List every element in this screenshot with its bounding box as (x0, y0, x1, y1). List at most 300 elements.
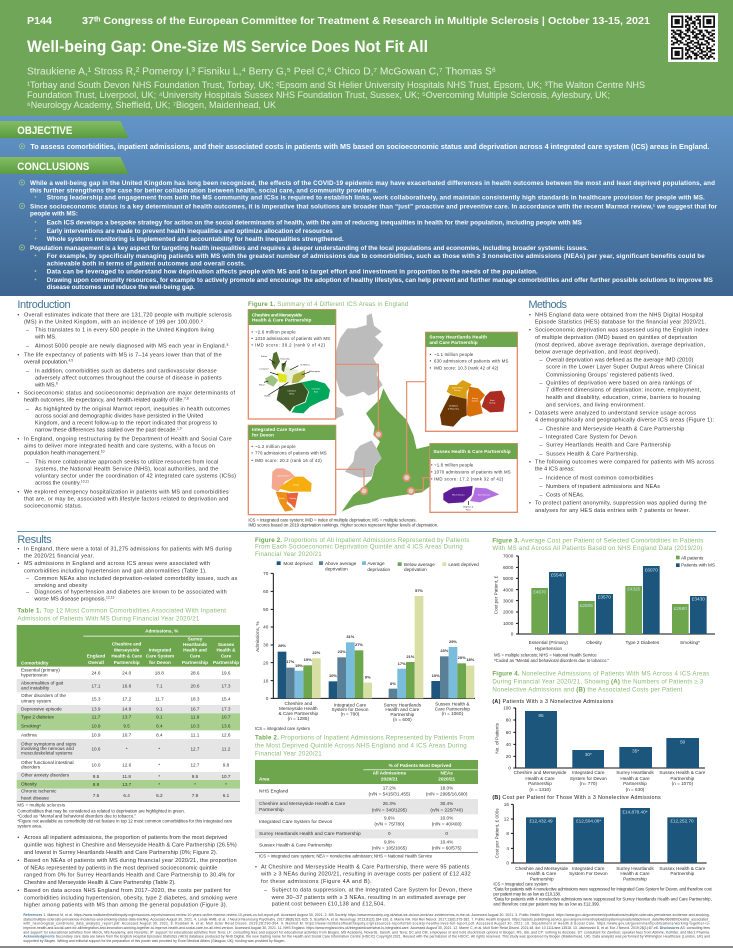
conclusions text: people with MS: (30, 211, 78, 218)
panel: table 2 and findings (255, 735, 478, 908)
figure 4 footnotes: ICS = integrated care system (493, 882, 548, 887)
figure 2 value labels: 17% (286, 659, 295, 664)
table 1 rows: 8.4 (156, 733, 163, 738)
conclusions text: For example, by specifically managing patients with MS with the greatest number of admissions due to comorbidities, such as those with ≥ 3 nonelective admissions (NEAs) per year, significant benefits could be (47, 253, 705, 260)
figure 2 bars (278, 596, 474, 698)
callout: Devon: 770 admissions of patients with MS (255, 451, 327, 456)
introduction text: population health management. (24, 451, 101, 457)
figure 3 axes: 7000 (503, 554, 514, 559)
figure 2 axes: 70 (263, 571, 269, 576)
methods text: Overall deprivation was defined as the average IMD (2010) (546, 358, 694, 364)
introduction text: In addition, comorbidities such as diabetes and cardiovascular disease (35, 368, 217, 374)
table 1 header: Care (190, 654, 201, 659)
affiliations (27, 80, 645, 110)
methods text: Quintiles of deprivation were based on area rankings of (546, 380, 692, 386)
figure 2 legend: deprivation (325, 567, 348, 572)
references and disclosures: References 1. Marmot M, et al. https://www.instituteofhealthequity.org/resources-reports/marmot-review-10-years-on/the-marmot-review-10-years-on-full-report.pdf. Accessed August 30, 2021. 2. MS Society. https://www.mssociety.org.uk/what-we-do/our-work/our-evidence/ms-in-the-uk. Accessed August 30, 2021. 3. Public Health England. https://www.gov.uk/government/publications/multiple-sclerosis-prevalence-incidence-and-smoking- (23, 913, 710, 917)
table 1 rows: 9.1 (156, 715, 163, 720)
table 1 header: Health & Care (111, 654, 142, 659)
map: Surrey Heartlands: & Waverley (448, 407, 460, 410)
table 2 rows: 18.0% (440, 785, 453, 790)
table 1 rows: 10.7 (221, 715, 231, 720)
table 1 footnotes (17, 803, 233, 829)
conclusions text: Early interventions are made to prevent health inequalities and optimize allocation of resources (47, 228, 333, 235)
introduction text: aims to deliver more integrated health and care systems, with a focus on (24, 444, 215, 450)
chart B: cost per patient: £14,878.40* (622, 810, 648, 815)
map: Cheshire and Merseyside: Wirral (259, 384, 265, 387)
table 1 footnotes: *Figure not available as comorbidity did not feature in top 12 most common comorbidities for this integrated care (17, 819, 233, 824)
figure 2 footnote: ICS = integrated care system (255, 726, 310, 731)
references and disclosures: supported by Biogen. Writing and editorial support for the preparation of this poster was provided by Excel Medical Affairs (Glasgow, UK); funding was provided by Biogen. (23, 939, 285, 943)
location markers (361, 431, 414, 494)
introduction text: This translates to 1 in every 500 people in the United Kingdom living (35, 328, 214, 334)
methods text: Costs of NEAs. (546, 492, 585, 498)
findings text: – (264, 888, 268, 894)
introduction text (17, 313, 236, 510)
references and disclosures: status/multiple-sclerosis-prevalence-incidence-and-smoking-status-data-briefing. Accessed August 30, 2021. 4. Lunde HMB, et al. J Neurol Neurosurg Psychiatry. 2017;88(8):621-625. 5. Scalfari A, et al. Neurology. 2013;81(2):184-192. 6. Marrie RA. Nat Rev Neurol. 2017;13(6):375-382. 7. Public Health England. https://assets.publishing.service.gov.uk/government/uploads/system/uploads/attachment_data/file/660860/Deaths_associated_ (23, 917, 710, 921)
results findings: ranged from 0% for Surrey Heartlands Health and Care Partnership to 30.4% for (24, 873, 235, 879)
chart A: patients with 3 or more nonelective admissions: (n = 630) (626, 787, 645, 792)
table 1 header: Care (221, 654, 232, 659)
chart A: patients with 3 or more nonelective admissions: (n = 1070) (672, 781, 693, 786)
table 1 footnotes: Comorbidities that may be considered as related to deprivation are highlighted in green. (17, 809, 185, 814)
results bullets: comorbidities including hypertension and gait abnormalities (Table 1). (24, 568, 207, 574)
table 1 rows: 12.6 (221, 733, 231, 738)
map: Sussex: Brighton & (463, 506, 474, 509)
figure 4 footnotes (493, 882, 712, 907)
methods text: Surrey Heartlands Health and Care Partnership (546, 443, 671, 449)
table 1 header: for Devon (149, 660, 171, 665)
panel: figure 1 map of ICS areas (248, 301, 517, 527)
methods text: – (539, 484, 543, 490)
table 1 rows: 9.5 (192, 774, 199, 779)
table 1 rows: 11.7 (92, 715, 101, 720)
table 1 rows: 15.3 (91, 697, 101, 702)
table 1 header: Partnership (114, 660, 140, 665)
map: Sussex: East Sussex (478, 494, 491, 497)
table 1 rows: Other anxiety disorders (21, 773, 70, 778)
introduction text: • (17, 391, 19, 397)
methods text: Sussex Health & Care Partnership. (546, 451, 639, 457)
callout: Cheshire and Merseyside: • (251, 336, 253, 341)
callout: Sussex: 1070 admissions of patients with MS (434, 469, 511, 474)
table 2 rows: Cheshire and Merseyside Health & Care (259, 801, 346, 807)
chart A heading: (A) Patients With ≥ 3 Nonelective Admissions (492, 699, 614, 705)
callout: Surrey Heartlands (426, 332, 517, 431)
results bullets: smoking and obesity (34, 583, 88, 589)
table 2 rows: (n/N = 60/575) (432, 846, 462, 851)
table 1 rows: 10.0 (91, 763, 101, 768)
figure 1 footnote (248, 517, 438, 527)
table 1 rows: 7.9 (192, 793, 199, 798)
table 1 header: Admissions, % (145, 629, 179, 634)
chart B: cost per patient: (B) Cost per Patient for Those With ≥ 3 Nonelective Admissions (492, 795, 661, 801)
table 1 rows: 13.9 (91, 707, 101, 712)
table 1 rows: Depressive episode (21, 706, 62, 711)
chart B: cost per patient: Integrated Care (572, 866, 605, 871)
table 2 title: Financial Year 2020/21 (255, 751, 322, 758)
results bullets: MS admissions in England and across ICS areas were associated with (24, 561, 210, 567)
table 1 header: Health & (217, 648, 236, 653)
introduction text: overall population. (24, 360, 69, 366)
figure 2 title (255, 537, 469, 558)
map: Cheshire and Merseyside: Sefton (261, 355, 268, 358)
figure 3 category labels: Hypertension (535, 646, 562, 651)
chart B: cost per patient: Surrey Heartlands (616, 866, 654, 871)
map: Surrey Heartlands: North West (452, 386, 463, 389)
chart A: patients with 3 or more nonelective admissions: 60 (506, 730, 511, 735)
chart A: patients with 3 or more nonelective admissions: 95 (538, 713, 544, 718)
table 1 rows: Smoking* (21, 724, 41, 729)
callout: Surrey Heartlands: • (430, 352, 432, 357)
table 1 rows: Chronic ischemic (21, 789, 57, 794)
chart A: patients with 3 or more nonelective admissions: Partnership (528, 781, 552, 786)
methods text: Numbers of inpatient admissions and NEAs (546, 484, 660, 490)
affiliations: ⁶Neurology Academy, Sheffield, UK; ⁷Biogen, Maidenhead, UK (27, 100, 276, 110)
introduction text: adversely affect outcomes throughout the course of disease in patients (35, 375, 222, 381)
figure 3 axes: 4000 (503, 587, 514, 592)
references and disclosures: Acknowledgments Secondary care data are taken from the English Hospital Episodes Statistics (HES) database produced by NHS Digital, the new trading name for the Health and Social Care Information Centre (HSCIC) Copyright 2021. Reused with the permission of the HSCIC. All rights reserved. This study was sponsored by Biogen (Maidenhead, UK). Data analysis was performed by Wilmington Healthcare (London, UK) and (23, 935, 710, 939)
figure 2 value labels: 27% (355, 642, 363, 647)
figure 2 legend: Least deprived (448, 562, 479, 567)
figure 4 footnotes: per patient may be as low as £10,138. (493, 891, 561, 896)
results bullets: • (17, 561, 19, 567)
figure 2 category labels (279, 701, 470, 722)
table 1 rows: Type 2 diabetes (21, 715, 55, 720)
callout: Devon: for Devon (252, 433, 274, 438)
table 2 header: NEAs (440, 771, 453, 776)
results bullets: Common NEAs also included deprivation-related comorbidity issues, such as (34, 576, 238, 582)
introduction text: 1,9 (177, 427, 182, 431)
table 1 rows: 9.5 (93, 774, 100, 779)
table 2 rows: Surrey Heartlands Health and Care Partnership (259, 831, 361, 837)
map: United Kingdom (335, 313, 437, 512)
figure 2 value labels: 57% (415, 588, 423, 593)
table 1 rows: 13.7 (122, 782, 132, 787)
chart A: patients with 3 or more nonelective admissions: (n= 770) (580, 781, 598, 786)
figure 3 axes: 6000 (503, 565, 514, 570)
table 1 rows: 12.7 (190, 747, 200, 752)
introduction text: 7,8 (184, 397, 189, 401)
figure 2 axes: Admissions, % (255, 621, 260, 652)
introduction text: voluntary sector under the coordination of 42 integrated care systems (ICSs) (35, 474, 236, 480)
table 1 rows: 6.1 (223, 793, 230, 798)
chart A: patients with 3 or more nonelective admissions: Partnership (670, 776, 695, 781)
table 2 rows: (n/N = 105/1065) (372, 846, 407, 851)
figure 2 axes: 20 (263, 660, 269, 665)
references and disclosures: and support for educational activities from Merck, MS Academy, and Novartis; IP: support for educational activities from Teva; LF: consulting fees and support for educational activities from Biogen, MS Academy, Novartis, Sanofi, and Teva; DC and CM: employees of and hold stock/stock options in Biogen; RS, GB, and CP: nothing to disclose; ST: consultant for Zambon; speaker fees from AbbVie, Kolhiter, and Merz Pharma. (23, 930, 710, 934)
conclusions text: Drawing upon community resources, for example to actively promote and encourage the adoption of healthy lifestyles, can help prevent and further manage comorbidities and offer further possible solutions to improve MS (47, 277, 713, 284)
chart B: cost per patient: 16 (504, 802, 509, 807)
introduction text: Overall estimates indicate that there are 131,720 people with multiple sclerosis (24, 313, 232, 319)
figure 3 bars: £4325 (627, 587, 641, 592)
table 1 rows: 11.9 (191, 715, 200, 720)
table 2 rows: Integrated Care System for Devon (259, 819, 333, 825)
chart A: patients with 3 or more nonelective admissions: 80 (506, 718, 511, 723)
methods text: – (539, 435, 543, 441)
affiliations: ¹Torbay and South Devon NHS Foundation Trust, Torbay, UK; ²Epsom and St Helier University Hospitals NHS Trust, Epsom, UK; ³The Walton Centre NHS (27, 80, 645, 90)
methods text: • (529, 410, 531, 416)
QR code (668, 13, 718, 62)
panel: figure 4 charts (492, 671, 709, 705)
chart B: cost per patient: Health & Care (620, 871, 650, 876)
table 2 header: Area (259, 777, 270, 782)
figure 2 value labels: 23% (440, 648, 449, 653)
chart A: patients with 3 or more nonelective admissions: System for Devon (570, 776, 607, 781)
table 1 footnotes: *Coded as “Mental and behavioral disorders due to tobacco.” (17, 813, 137, 818)
table 1 rows: * (158, 747, 160, 752)
chart A: patients with 3 or more nonelective admissions: Surrey Heartlands (616, 770, 654, 775)
figure 2 legend: Most deprived (283, 561, 313, 566)
figure 2 legend: Above average (325, 561, 357, 566)
figure 3 axes: 0 (511, 632, 514, 637)
methods text: – (539, 451, 543, 457)
map: Cheshire and Merseyside: East (314, 390, 319, 393)
methods text: NHS England data were obtained from the NHS Digital Hospital (535, 313, 703, 319)
map: Cheshire and Merseyside: West (289, 392, 295, 395)
figure 3 footnotes (494, 653, 610, 663)
conclusions text: disease outcomes and reduce the well-being gap. (47, 284, 195, 291)
introduction text: (MS) in the United Kingdom, with an incidence of 199 per 100,000.² (24, 319, 203, 325)
map: Cheshire and Merseyside (259, 352, 330, 413)
results bullets: 12,13 (106, 595, 114, 599)
callout: Sussex: IMD score: 17.2 (rank 32 of 42) (434, 477, 504, 482)
callout: Surrey Heartlands: and Care Partnership (429, 340, 478, 345)
figure 2 category labels: Cheshire and (284, 701, 313, 706)
table 1 rows: 24.0 (122, 670, 132, 675)
chart A: patients with 3 or more nonelective admissions: Health & Care (620, 776, 650, 781)
references and disclosures: with_neurological_conditions_data_analysis_report.pdf. Accessed August 30, 2021. 8. Roddam H, et al. Mult Scler Relat Disord. 2019;28:290-304. 9. Marmot M. https://www.instituteofhealthequity.org/resources-reports/fair-society-healthy-lives-full-report.pdf. Accessed August 30, 2021. 10. Department of Health & Social Care. https://www.gov.uk/government/publications/working-together-to- (23, 922, 710, 926)
table 2 rows: (n/N = 340/1295) (372, 807, 407, 812)
chart B: cost per patient: Sussex Health & Care (659, 866, 706, 871)
introduction text: across social and demographic divides have persisted in the United (35, 414, 203, 420)
figure 2 category labels: System for Devon (331, 707, 369, 712)
findings text (255, 864, 472, 908)
map: Surrey Heartlands: Guildford (449, 405, 459, 408)
map: Sussex (443, 486, 499, 512)
methods text: Commissioning Groups’ registered patients lived. (546, 372, 674, 378)
heading: introduction: Introduction (17, 299, 71, 311)
figure 3 bars: £4670 (533, 590, 547, 595)
references and disclosures: improve-health-and-social-care-for-all/integration-and-innovation-working-together-to-improve-health-and-social-care-for-all-html-version. Accessed August 30, 2021. 11. NHS England. https://www.england.nhs.uk/integratedcare/what-is-integrated-care. Accessed August 30, 2021. 12. Marrie C, et al. Mult Scler Relat Disord. 2021;48. doi: 10.1111/ane.13518. 13. Jakimovski D, et al. Eur J Neurol. 2019;26(1):87-e8. Disclosures AS: consulting fees (23, 926, 710, 930)
methods text: Datasets were analyzed to understand service usage across (535, 410, 696, 416)
introduction text: narrow these differences has stalled over the past decade. (35, 428, 177, 434)
table 1 rows: 11.1 (191, 733, 200, 738)
table 1 rows: 8.4 (156, 724, 163, 729)
figure 2 category labels: & Care Partnership (279, 711, 319, 716)
figure 3 title: With MS and Across All Patients Based on NHS England Data (2019/20) (492, 545, 702, 552)
conclusions text: Data can be leveraged to understand how deprivation affects people with MS and to target effort and investment in proportion to the needs of the population. (47, 269, 538, 276)
results bullets: Diagnoses of hypertension and diabetes are known to be associated with (34, 590, 227, 596)
figure 4 title: During Financial Year 2020/21, Showing (A) the Numbers of Patients ≥ 3 (492, 679, 704, 686)
table 2 rows: (n/N = 225/740) (430, 807, 463, 812)
figure 2 value labels: 10% (329, 673, 337, 678)
figure 2 axes: 50 (263, 607, 269, 612)
conclusions tab (0, 157, 128, 174)
methods text: score in the Lower Layer Super Output Areas where Clinical (546, 365, 704, 371)
table 1 rows: 8.9 (93, 782, 100, 787)
table 1 rows: 20.6 (190, 683, 200, 688)
conclusions text: Whole systems monitoring is implemented and accountability for health inequalities strengthened. (47, 236, 344, 243)
table 1 rows: Other disorders of the (21, 693, 66, 698)
figure 4 title (492, 671, 709, 694)
introduction text: with MS. (35, 382, 56, 388)
callout: Devon: • (251, 458, 253, 463)
introduction text: across the country. (35, 481, 81, 487)
table 1 rows: and instability (21, 685, 50, 690)
table 1 rows: Obesity (21, 782, 37, 787)
figure 2 category labels: Care Partnership (435, 706, 470, 711)
map: Devon: Devon (293, 485, 300, 487)
figure 3 category labels (529, 640, 700, 651)
figure 2 title: From Each Socioeconomic Deprivation Quintile and 4 ICS Areas During (255, 544, 463, 551)
table 1 rows: 6.4 (123, 793, 130, 798)
table 2 title: the Most Deprived Quintile Across NHS England and 4 ICS Areas During (255, 743, 467, 750)
table 1 header: Heartlands (183, 642, 207, 647)
figure 2 value labels: 21% (406, 654, 415, 659)
chart A: patients with 3 or more nonelective admissions: No. of Patients (494, 722, 499, 754)
methods text: The following outcomes were compared for patients with MS across (535, 459, 714, 465)
table 1 rows: 18.3 (190, 697, 200, 702)
callout: Sussex: Sussex Health & Care Partnership (433, 449, 511, 454)
introduction text: – (26, 328, 30, 334)
table 1 rows: 7.5 (93, 793, 100, 798)
findings text: At Cheshire and Merseyside Health & Care Partnership, there were 95 patients (261, 864, 470, 870)
conclusions text (19, 180, 718, 291)
table 2 rows: 0 (445, 831, 448, 836)
methods text (529, 313, 714, 514)
chart B: cost per patient: Health & Care (527, 871, 557, 876)
methods text: 4 demographically and geographically diverse ICS areas (Figure 1): (535, 418, 714, 424)
figure 2 category labels: (n = 780) (341, 712, 360, 717)
callout: Sussex: ~1.8 million people (434, 463, 474, 468)
table 1 header: Integrated (149, 648, 171, 653)
callout: Cheshire and Merseyside: Health & Care Partnership (252, 318, 311, 323)
table 2 rows: 30.4% (440, 801, 453, 806)
table 1 rows: 5.2 (156, 793, 163, 798)
table 1 rows: * (126, 747, 128, 752)
conclusions text: achievable both in terms of patient outcomes and overall costs. (47, 260, 246, 267)
table 1 rows: 14.9 (122, 707, 132, 712)
figure 2 axes: 0 (266, 696, 269, 701)
table 2 rows: NHS England (259, 789, 289, 795)
table 1 header: Comorbidity (21, 660, 49, 665)
figure 3 axes: 2000 (503, 610, 514, 615)
table 1 rows: 19.6 (221, 670, 231, 675)
chart A: patients with 3 or more nonelective admissions: Integrated Care (572, 770, 605, 775)
table 1 header: Partnership (182, 660, 208, 665)
figure 3 footnotes: MS = multiple sclerosis; NHS = National Health Service (494, 653, 597, 658)
introduction text: systems, the National Health Service (NHS), local authorities, and the (35, 467, 218, 473)
chart B: cost per patient: £12,432.49 (529, 819, 553, 824)
figure 3 category labels: Essential (Primary) (529, 640, 568, 645)
table 1 footnotes: MS = multiple sclerosis (17, 803, 65, 808)
table 1 rows (21, 668, 231, 800)
table 1 rows: heart disease (21, 795, 49, 800)
figure 3 footnotes: *Coded as “Mental and behavioral disorders due to tobacco.” (494, 658, 610, 663)
conclusions text: While a well-being gap in the United Kingdom has long been recognized, the effects of the COVID-19 epidemic may have exacerbated differences in health outcomes between the most and least deprived populations, and (30, 180, 715, 187)
introduction text: socioeconomic status. (24, 504, 83, 510)
figure 2 title: Financial Year 2020/21 (255, 551, 322, 558)
table 2 rows: 17.2% (383, 785, 396, 790)
figure 2 legend: deprivation (367, 567, 391, 572)
callout: Devon: IMD score: 20.2 (rank 16 of 42) (255, 458, 322, 463)
table 1 (17, 625, 240, 802)
table 1 rows: 15.4 (221, 697, 231, 702)
table 1 rows: 11.7 (155, 697, 164, 702)
figure 2 category labels: (n = 1060) (442, 711, 463, 716)
chart A: patients with 3 or more nonelective admissions: 20 (506, 754, 511, 759)
results findings: • (17, 858, 19, 864)
table 1 rows: * (194, 782, 196, 787)
chart A: patients with 3 or more nonelective admissions: Health & Care (525, 776, 555, 781)
figure 3 bars: £3570 (598, 595, 611, 600)
callout: Devon: Integrated Care System (252, 427, 305, 432)
figure 3 bars (531, 566, 707, 634)
results findings: comorbidities including hypertension, obesity, type 2 diabetes, and smoking were (24, 895, 237, 901)
affiliations: Foundation Trust, Liverpool, UK; ⁴University Hospitals Sussex NHS Foundation Trust, Sussex, UK; ⁵Overcoming Multiple Sclerosis, Aylesbury, UK; (27, 90, 610, 100)
poster number: P144 (27, 15, 52, 27)
results bullets: – (26, 576, 30, 582)
title: Well-being Gap: One-Size MS Service Does Not Fit All (27, 38, 428, 56)
objective text: To assess comorbidities, inpatient admissions, and their associated costs in patients with MS based on socioeconomic status and deprivation across 4 integrated care system (ICS) areas in England. (30, 142, 709, 151)
callout: Surrey Heartlands: • (430, 365, 432, 370)
map: Devon: Torbay (289, 497, 297, 500)
chart A: patients with 3 or more nonelective admissions: Cheshire and Merseyside (514, 770, 567, 775)
chart B: cost per patient: Partnership (530, 876, 554, 881)
table 1 rows: 13.6 (221, 724, 231, 729)
results findings: higher among patients with MS than among the general population (Figure 3). (24, 902, 228, 908)
callout: Cheshire and Merseyside: Cheshire and Merseyside (252, 312, 302, 317)
table 1 row backgrounds (17, 679, 240, 802)
introduction text: • (17, 353, 19, 359)
methods text: Integrated Care System for Devon (546, 435, 637, 441)
figure 2 axes: 40 (263, 625, 269, 630)
table 1 rows: 10.6 (91, 747, 101, 752)
conclusions text: this further strengthens the case for better collaboration between health, social care, and community providers. (30, 187, 378, 194)
methods text: Socioeconomic deprivation was assessed using the English index (535, 328, 709, 334)
table 1 rows: Abnormalities of gait (21, 680, 64, 685)
findings text: for these admissions (Figure 4A and B). (261, 879, 372, 885)
chart A: patients with 3 or more nonelective admissions: 50 (680, 740, 686, 745)
table 1 rows: 16.8 (122, 683, 132, 688)
table 2 rows: 10.0% (440, 816, 453, 821)
results findings: • (17, 888, 19, 894)
table 2 title (255, 735, 474, 758)
results findings: Across all inpatient admissions, the proportion of patients from the most deprived (24, 835, 227, 841)
chart B: cost per patient: System For Devon (569, 871, 608, 876)
figure 2 value labels: 17% (398, 661, 406, 666)
methods text: – (539, 492, 543, 498)
introduction text: • (17, 313, 19, 319)
table 2 rows: 10.4% (440, 840, 453, 845)
objective tab (0, 121, 128, 138)
panel: figure 3 bar chart (492, 538, 715, 663)
results bullets (17, 547, 238, 602)
callout: Cheshire and Merseyside: • (251, 343, 253, 348)
figure 3 bars: £2605 (580, 603, 593, 608)
figure 2 title: Figure 2. Proportions of All Inpatient Admissions Represented by Patients (255, 537, 469, 544)
introduction text: • (17, 490, 19, 496)
callout: Surrey Heartlands: 630 admissions of patients with MS (434, 359, 508, 364)
chart B: cost per patient: Partnership (670, 871, 695, 876)
authors: Straukiene A,¹ Stross R,² Pomeroy I,³ Fisniku L,⁴ Berry G,⁵ Peel C,⁶ Chico D,⁷ McGowan C,⁷ Thomas S⁶ (27, 66, 496, 78)
callout: Cheshire and Merseyside: • (251, 330, 253, 335)
figure 4 footnotes: *Data for patients with 4 nonelective admissions were suppressed for Integrated Care System for Devon, and therefore cost (493, 886, 712, 891)
callout: Cheshire and Merseyside: IMD score: 39.2 (rank 9 of 42) (255, 343, 326, 348)
chart A: patients with 3 or more nonelective admissions: 100 (503, 706, 511, 711)
figure 1 title: Figure 1. Summary of 4 Different ICS Areas in England (248, 301, 409, 308)
